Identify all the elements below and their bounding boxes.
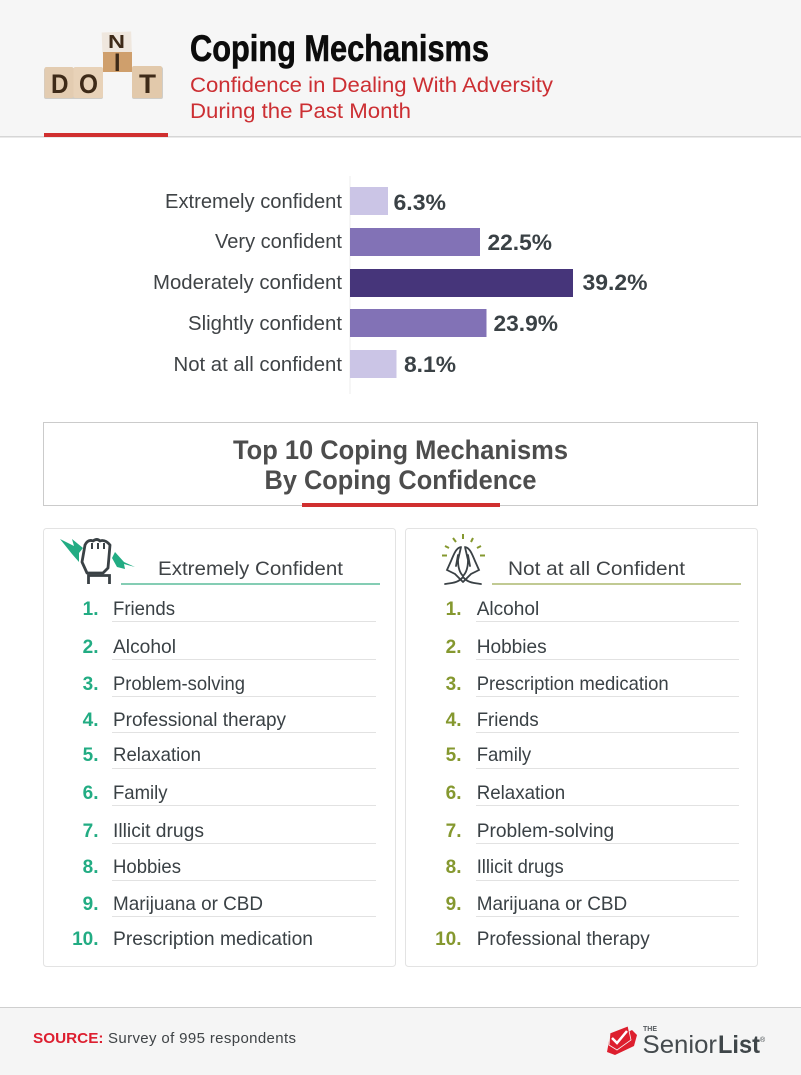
ranked list: 6. xyxy=(446,783,462,804)
icon: DO NOT wooden blocks: O xyxy=(79,69,98,99)
bar: very confident: Very confident xyxy=(215,231,342,253)
ranked list: Illicit drugs xyxy=(477,857,564,878)
ranked list: Prescription medication xyxy=(477,674,669,695)
panel heading: Not at all Confident xyxy=(508,558,686,580)
panel heading: Extremely Confident xyxy=(158,558,344,580)
bar: slightly confident xyxy=(188,309,558,337)
bar: moderately confident xyxy=(153,269,648,297)
bar: extremely confident xyxy=(165,187,446,215)
panel: extremely confident xyxy=(44,528,396,966)
panel: not at all confident xyxy=(406,528,758,966)
icon: praying hands xyxy=(442,534,485,584)
ranked list: Family xyxy=(113,783,168,804)
ranked list: 5. xyxy=(446,745,462,766)
ranked list: Alcohol xyxy=(113,637,176,658)
ranked list: 10. xyxy=(72,929,98,950)
ranked list: Family xyxy=(477,745,532,766)
logo: The Senior List xyxy=(607,1026,766,1059)
bar: not at all confident xyxy=(174,350,456,378)
bar: not at all confident: 8.1% xyxy=(404,352,456,377)
logo: The Senior List: Senior xyxy=(642,1031,717,1059)
section heading box: By Coping Confidence xyxy=(264,465,536,495)
ranked list: 8. xyxy=(83,857,98,878)
subtitle xyxy=(190,73,553,123)
ranked list: 9. xyxy=(446,894,462,915)
ranked list xyxy=(435,599,739,950)
icon: DO NOT wooden blocks: D xyxy=(51,69,68,99)
bar: not at all confident: Not at all confident xyxy=(174,354,342,376)
ranked list: 1. xyxy=(446,599,462,620)
ranked list: Professional therapy xyxy=(477,929,650,950)
title: Coping Mechanisms xyxy=(190,28,489,69)
bar: extremely confident: Extremely confident xyxy=(165,191,342,213)
bar: slightly confident: Slightly confident xyxy=(188,313,342,335)
ranked list: Marijuana or CBD xyxy=(113,894,263,915)
section heading box xyxy=(44,422,758,507)
ranked list: 7. xyxy=(446,821,462,842)
ranked list: Hobbies xyxy=(477,637,547,658)
subtitle: Confidence in Dealing With Adversity xyxy=(190,73,553,97)
logo: The Senior List: THE xyxy=(643,1026,657,1033)
ranked list: 3. xyxy=(83,674,98,695)
ranked list xyxy=(72,599,376,950)
icon: fist with lightning xyxy=(60,539,135,584)
logo: The Senior List: List xyxy=(718,1031,761,1059)
ranked list: Friends xyxy=(477,710,539,731)
icon: DO NOT wooden blocks: N xyxy=(108,32,125,52)
ranked list: 2. xyxy=(446,637,462,658)
subtitle: During the Past Month xyxy=(190,99,411,123)
bar: very confident: 22.5% xyxy=(488,230,552,255)
bar: slightly confident: 23.9% xyxy=(494,311,558,336)
ranked list: Prescription medication xyxy=(113,929,313,950)
ranked list: 4. xyxy=(83,710,98,731)
ranked list: Problem-solving xyxy=(477,821,614,842)
ranked list: Illicit drugs xyxy=(113,821,204,842)
ranked list: 9. xyxy=(83,894,98,915)
ranked list: 3. xyxy=(446,674,462,695)
source note: Survey of 995 respondents xyxy=(108,1030,296,1047)
icon: DO NOT wooden blocks: T xyxy=(139,69,157,99)
icon: DO NOT wooden blocks: I xyxy=(114,49,120,77)
ranked list: 7. xyxy=(83,821,98,842)
ranked list: Professional therapy xyxy=(113,710,286,731)
source note: SOURCE: xyxy=(33,1030,104,1047)
bar: extremely confident: 6.3% xyxy=(394,190,446,215)
ranked list: 10. xyxy=(435,929,462,950)
ranked list: Marijuana or CBD xyxy=(477,894,627,915)
ranked list: Friends xyxy=(113,599,175,620)
ranked list: 2. xyxy=(83,637,98,658)
ranked list: Alcohol xyxy=(477,599,539,620)
bar: moderately confident: Moderately confident xyxy=(153,272,342,294)
ranked list: 1. xyxy=(83,599,98,620)
ranked list: 5. xyxy=(83,745,98,766)
ranked list: 4. xyxy=(446,710,462,731)
ranked list: Hobbies xyxy=(113,857,181,878)
header band xyxy=(0,0,801,138)
icon: DO NOT wooden blocks xyxy=(44,32,163,99)
bar: very confident xyxy=(215,228,552,256)
ranked list: Relaxation xyxy=(113,745,201,766)
section heading box: Top 10 Coping Mechanisms xyxy=(233,435,568,465)
ranked list: 8. xyxy=(446,857,462,878)
bar: moderately confident: 39.2% xyxy=(582,270,648,295)
footer band xyxy=(0,1007,801,1075)
bar chart: confidence in dealing with adversity xyxy=(153,176,648,394)
ranked list: Relaxation xyxy=(477,783,565,804)
logo: The Senior List: ® xyxy=(760,1036,766,1044)
ranked list: 6. xyxy=(83,783,98,804)
ranked list: Problem-solving xyxy=(113,674,245,695)
